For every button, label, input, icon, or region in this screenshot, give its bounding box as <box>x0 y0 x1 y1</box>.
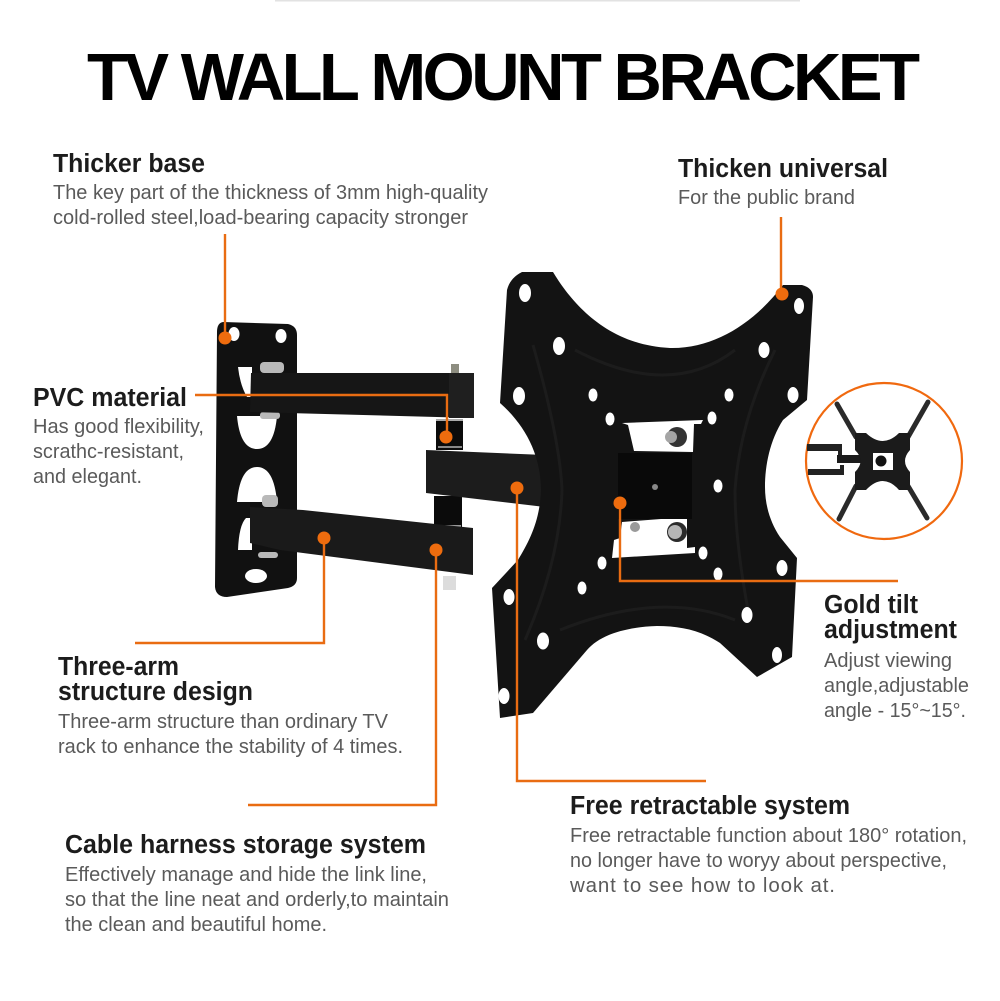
callout lines and markers <box>135 217 898 805</box>
mini extension arms <box>837 402 928 519</box>
text block: thicken universal: For the public brand <box>678 186 855 209</box>
text block: thicken universal <box>678 155 888 209</box>
text block: free retractable system: want to see how to look at. <box>569 874 835 897</box>
text block: three-arm structure design: Three-arm <box>58 653 179 681</box>
marker dots <box>218 288 788 556</box>
tilt bracket <box>618 427 692 542</box>
mini swivel arm <box>837 455 861 463</box>
text block: cable harness storage system: Effectively manage and hide the link line, <box>65 863 427 886</box>
text block: gold tilt adjustment: adjustment <box>824 616 957 644</box>
lower arm <box>250 507 473 575</box>
plate body <box>492 272 813 718</box>
wall plate holes and cutouts <box>228 327 286 583</box>
text block: PVC material <box>33 384 204 488</box>
text block: cable harness storage system <box>65 831 449 936</box>
text block: thicker base: cold-rolled steel,load-bearing capacity stronger <box>53 206 468 229</box>
text block: free retractable system <box>569 792 967 897</box>
plate embossing <box>525 345 775 640</box>
text block: free retractable system: no longer have to woryy about perspective, <box>570 849 947 872</box>
wall plate <box>215 322 297 597</box>
mini wall arm <box>807 444 844 475</box>
line: thicker base <box>224 234 226 338</box>
plate mounting holes <box>498 284 804 704</box>
line: PVC material <box>195 395 447 437</box>
text block: PVC material: PVC material <box>33 384 187 412</box>
mini plate <box>855 433 910 490</box>
text block: three-arm structure design: structure design <box>58 678 253 706</box>
text block: cable harness storage system: so that the line neat and orderly,to maintain <box>65 888 449 911</box>
text block: PVC material: scrathc-resistant, <box>33 440 184 463</box>
middle arm <box>426 450 545 507</box>
text block: three-arm structure design: rack to enhance the stability of 4 times. <box>58 735 403 758</box>
line: free retractable <box>517 488 706 781</box>
line: gold tilt <box>620 503 898 581</box>
lower pivot <box>434 496 462 528</box>
text block: PVC material: Has good flexibility, <box>33 415 204 438</box>
text block: cable harness storage system: Cable harness storage system <box>65 831 426 859</box>
text block: gold tilt adjustment: angle - 15°~15°. <box>824 699 966 722</box>
text block: thicker base <box>53 150 489 229</box>
upper arm end cap <box>449 373 474 418</box>
text block: gold tilt adjustment: angle,adjustable <box>824 674 969 697</box>
text block: cable harness storage system: the clean and beautiful home. <box>65 913 327 936</box>
line: thicken universal <box>780 217 782 294</box>
centre window <box>612 420 703 558</box>
text block: three-arm structure design <box>58 653 403 758</box>
mini plate centre <box>873 453 893 470</box>
text block: gold tilt adjustment <box>824 591 969 722</box>
text block: free retractable system: Free retractable function about 180° rotation, <box>570 824 967 847</box>
text block: thicken universal: Thicken universal <box>678 155 888 183</box>
text block: thicker base: Thicker base <box>53 150 205 178</box>
line: cable harness <box>248 550 436 805</box>
bolts <box>258 362 459 590</box>
illustration: wall plate and swing arms <box>215 322 545 597</box>
upper arm <box>250 373 474 418</box>
text block: thicker base: The key part of the thickness of 3mm high-quality <box>53 181 489 204</box>
mini plate bracket <box>876 456 886 466</box>
inset circle: mount with extension arms <box>806 383 962 539</box>
text block: PVC material: and elegant. <box>33 465 142 488</box>
text block: three-arm structure design: Three-arm structure than ordinary TV <box>58 710 388 733</box>
title: TV WALL MOUNT BRACKET <box>87 40 920 115</box>
upper pivot <box>436 419 463 450</box>
line: three-arm <box>135 538 324 643</box>
illustration: VESA plate <box>492 272 813 718</box>
text block: gold tilt adjustment: Adjust viewing <box>824 649 952 672</box>
inset ring <box>806 383 962 539</box>
text block: gold tilt adjustment: Gold tilt <box>824 591 918 619</box>
text block: free retractable system: Free retractable system <box>570 792 850 820</box>
